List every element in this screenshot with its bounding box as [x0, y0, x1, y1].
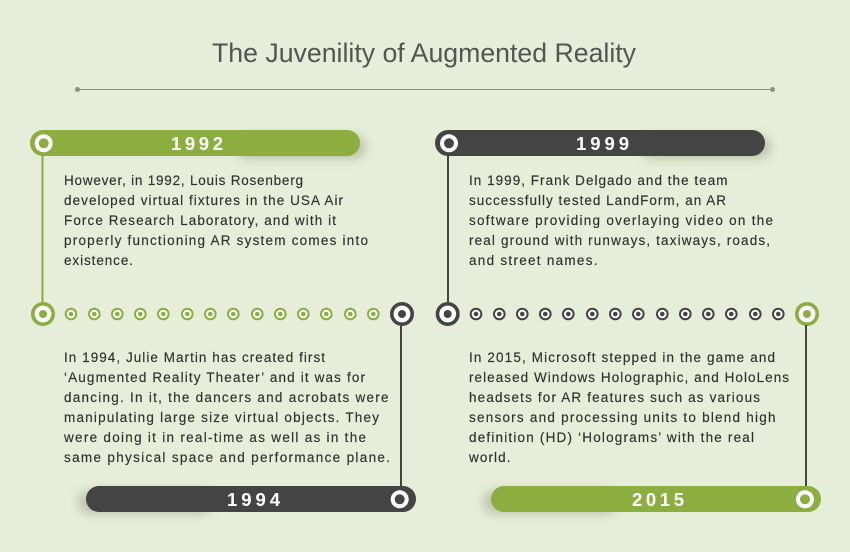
title: The Juvenility of Augmented Reality	[212, 38, 636, 68]
heading: 1994: 1994	[227, 489, 281, 510]
text block: 2015: released Windows Holographic, and HoloLens	[469, 370, 789, 385]
heading: 2015	[491, 486, 821, 512]
text block: 2015: sensors and processing units to blend high	[469, 410, 776, 425]
text block: 1992: Force Research Laboratory, and with it	[64, 213, 336, 228]
text block: 2015: definition (HD) ‘Holograms’ with the real	[469, 430, 754, 445]
text block: 1999: and street names.	[469, 253, 598, 268]
heading: 1994	[86, 486, 416, 512]
heading: 1992: 1992	[171, 133, 223, 154]
text block: 1992: properly functioning AR system comes into	[64, 233, 368, 248]
text block: 1994: dancing. In it, the dancers and acrobats were	[64, 390, 388, 405]
text block: 2015	[468, 350, 789, 465]
text block: 1994: manipulating large size virtual objects. They	[64, 410, 379, 425]
text block: 1992	[64, 173, 368, 268]
dotted timeline: right	[438, 304, 817, 324]
panel: 2015	[468, 325, 821, 514]
text block: 2015: In 2015, Microsoft stepped in the game and	[469, 350, 775, 365]
text block: 2015: headsets for AR features such as various	[469, 390, 760, 405]
dotted timeline: left	[33, 304, 412, 324]
text block: 1994: same physical space and performance plane.	[64, 450, 390, 465]
text block: 1999: In 1999, Frank Delgado and the team	[469, 173, 728, 188]
heading: 1999	[435, 130, 765, 156]
text block: 1994	[63, 350, 390, 465]
panel: 1992	[30, 130, 368, 306]
heading: 1999: 1999	[576, 133, 629, 154]
panel: 1999	[435, 130, 773, 306]
text block: 1999: successfully tested LandForm, an AR	[469, 193, 726, 208]
text block: 1992: existence.	[64, 253, 133, 268]
text block: 1994: In 1994, Julie Martin has created first	[64, 350, 325, 365]
text block: 1999	[469, 173, 773, 268]
text block: 1999: software providing overlaying video on the	[469, 213, 773, 228]
text block: 1992: developed virtual fixtures in the USA Air	[64, 193, 344, 208]
text block: 1999: real ground with runways, taxiways, roads,	[469, 233, 770, 248]
text block: 1994: ‘Augmented Reality Theater’ and it was for	[64, 370, 366, 385]
title divider	[75, 87, 775, 92]
text block: 1994: were doing it in real-time as well as in the	[63, 430, 366, 445]
heading: 1992	[30, 130, 360, 156]
panel: 1994	[63, 325, 416, 514]
heading: 2015: 2015	[632, 489, 684, 510]
text block: 2015: world.	[468, 450, 510, 465]
text block: 1992: However, in 1992, Louis Rosenberg	[64, 173, 303, 188]
